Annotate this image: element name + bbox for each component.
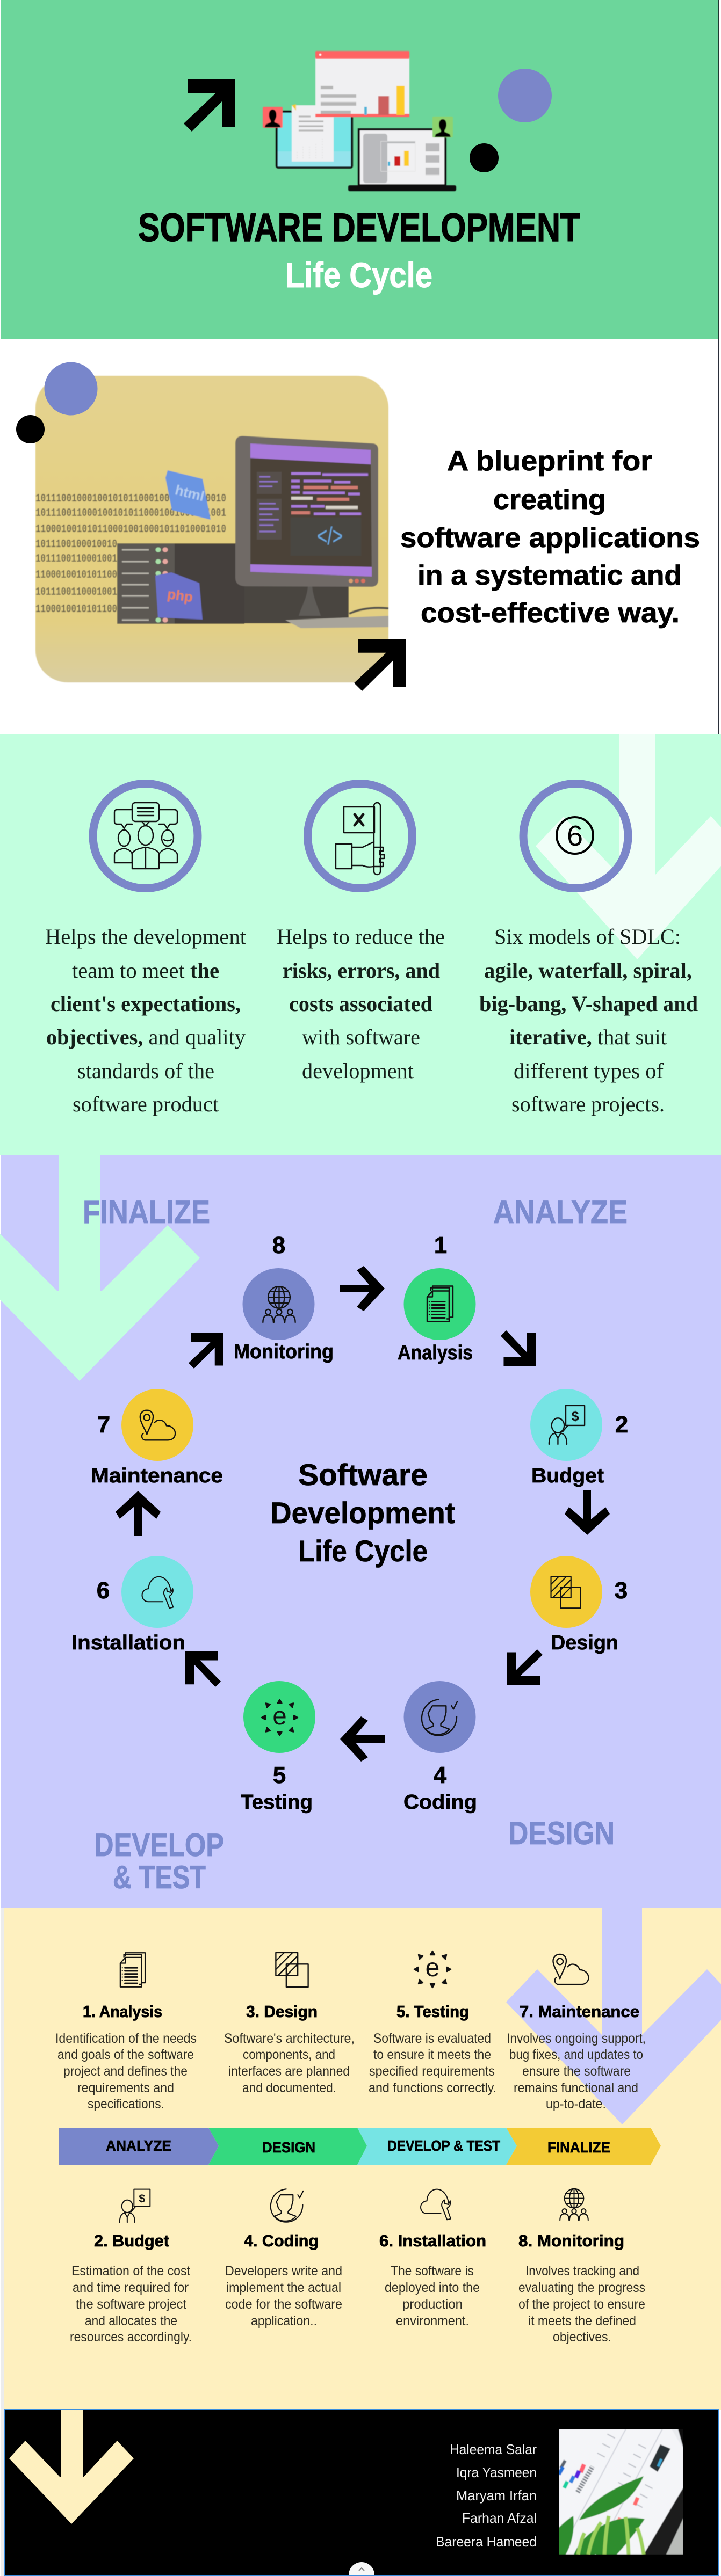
item: design: components, and [243,2047,335,2062]
text block: six models: big-bang, V-shaped and [479,992,698,1016]
text block: blueprint statement: in a systematic and [417,560,682,591]
item: design: 3. Design [246,2002,318,2021]
step 3 design [530,1556,628,1654]
icon: team ring [93,784,198,888]
step 6 installation: 6 [97,1577,110,1604]
arrow: 2 to 3 [565,1490,610,1535]
item: analysis: requirements and [77,2080,174,2095]
text block: client expectations: software product [73,1092,219,1116]
item: maintenance: bug fixes, and updates to [509,2047,643,2062]
chevron bar: FINALIZE [547,2139,610,2156]
decorative arrow [9,2410,134,2524]
item: budget: and allocates the [85,2313,177,2328]
image: coding workstation photo: html [174,482,206,504]
item: testing: Software is evaluated [373,2031,491,2046]
icon: risk flag ring [307,784,413,888]
icon: black circle [16,415,45,443]
credits [436,2441,537,2550]
step 2 budget [530,1389,628,1487]
arrow: 5 to 6 [185,1651,221,1687]
step 1 analysis [398,1232,476,1364]
image: coding workstation photo: 1011100110001001 [35,586,117,599]
text block: six models: iterative, that suit [509,1025,667,1049]
decorative arrow [0,1155,200,1381]
item: maintenance: 7. Maintenance [520,2002,639,2021]
text block: blueprint statement: creating [493,484,606,515]
step 5 testing: Testing [241,1791,313,1814]
item: maintenance: ensure the software [522,2064,631,2079]
phase label: develop and test [96,1833,223,1889]
text block: blueprint statement: software applications [400,522,700,554]
image: coding workstation photo: </> [317,522,343,550]
item: installation: deployed into the [385,2280,480,2295]
icon: black circle [470,143,499,172]
item: maintenance: remains functional and [514,2080,638,2095]
phase label: design: DESIGN [508,1815,615,1851]
text block: client expectations: Helps the development [45,925,246,949]
image: dashboard with plant [559,2429,683,2555]
credits: Haleema Salar [450,2441,537,2457]
item: budget: 2. Budget [94,2231,169,2250]
item: monitoring: 8. Monitoring [518,2231,624,2250]
text block: blueprint statement [400,446,700,629]
credits: Maryam Irfan [456,2487,537,2504]
arrow: 4 to 5 [340,1716,385,1762]
item: budget: the software project [76,2297,186,2312]
item: monitoring: evaluating the progress [518,2280,645,2295]
text block: six models: Six models of SDLC: [494,925,681,949]
phase label: analyze: ANALYZE [493,1194,628,1230]
chevron bar: DEVELOP & TEST [387,2137,500,2154]
item: design: and documented. [242,2080,336,2095]
item: coding [225,2189,342,2328]
step 6 installation [71,1556,193,1654]
phase label: develop and test: & TEST [113,1859,206,1895]
text block: six models [479,925,698,1116]
step 7 maintenance [91,1389,223,1487]
panel: footer [1,2406,719,2576]
item: monitoring: of the project to ensure [518,2297,645,2312]
item: analysis: and goals of the software [57,2047,194,2062]
icon: header arrow [184,79,235,132]
phase label: develop and test: DEVELOP [94,1827,224,1863]
arrow: 8 to 1 [340,1266,385,1311]
item: coding: implement the actual [226,2280,341,2295]
text block: client expectations: standards of the [77,1059,214,1083]
image: coding workstation photo: 1100010010101100 [35,569,117,581]
icon: six models ring [523,784,628,888]
item: installation [379,2189,486,2328]
text block: client expectations: client's expectations, [51,992,241,1016]
step 8 monitoring: Monitoring [234,1341,334,1363]
item: monitoring [518,2189,645,2345]
item: coding: Developers write and [225,2264,342,2279]
decorative arrow [506,1908,721,2124]
text block: six models: different types of [514,1059,664,1083]
text block: blueprint statement: cost-effective way. [421,598,680,629]
icon: six models ring: 6 [567,820,583,852]
item: installation: environment. [396,2313,469,2328]
text block: client expectations [45,925,246,1116]
text block: blueprint statement: A blueprint for [447,446,652,477]
chevron bar: DESIGN [262,2139,315,2156]
credits: Iqra Yasmeen [456,2464,537,2480]
text block: reduce risks: development [302,1059,414,1083]
panel: life cycle diagram [0,1155,721,1908]
step 1 analysis: 1 [434,1232,447,1258]
chevron bar [59,2128,661,2165]
image: coding workstation photo: 1011100110001001 [35,553,117,565]
credits: Bareera Hameed [436,2534,537,2550]
text block: reduce risks: with software [302,1025,420,1049]
icon: purple circle [44,362,98,416]
arrow: 7 to 8 [189,1333,223,1369]
item: coding: code for the software [225,2297,342,2312]
chevron bar: ANALYZE [106,2137,171,2154]
step 4 coding [403,1681,477,1814]
panel: header [1,0,719,339]
icon: arrow [354,639,406,691]
item: analysis: specifications. [88,2097,164,2112]
item: design [224,1953,355,2095]
text block: reduce risks [277,925,445,1083]
text block: client expectations: objectives, and quality [46,1025,246,1049]
step 4 coding: 4 [434,1762,447,1788]
item: analysis: Identification of the needs [55,2031,197,2046]
credits: Farhan Afzal [462,2510,537,2526]
arrow: 1 to 2 [501,1330,536,1366]
text block: reduce risks: costs associated [289,992,432,1016]
item: installation: 6. Installation [379,2231,486,2250]
step 7 maintenance: 7 [97,1411,110,1438]
item: coding: 4. Coding [244,2231,319,2250]
step 5 testing [241,1681,315,1814]
decorative arrow [536,734,721,959]
panel: phase details [1,1908,721,2410]
icon: scroll to top button [349,2562,374,2575]
item: budget [70,2189,192,2345]
phase label: finalize: FINALIZE [83,1194,210,1230]
item: monitoring: it meets the defined [528,2313,636,2328]
text block: six models: agile, waterfall, spiral, [484,958,692,983]
step 7 maintenance: Maintenance [91,1465,223,1487]
item: design: Software's architecture, [224,2031,355,2046]
central title: Software [298,1458,428,1491]
image: coding workstation photo [35,376,388,682]
step 8 monitoring: 8 [272,1232,285,1258]
arrow: 3 to 4 [507,1649,543,1685]
item: budget: and time required for [73,2280,189,2295]
step 3 design: 3 [615,1577,628,1604]
item: testing: to ensure it meets the [373,2047,491,2062]
text block: reduce risks: Helps to reduce the [277,925,445,949]
item: design: interfaces are planned [228,2064,350,2079]
item: analysis: project and defines the [63,2064,188,2079]
item: maintenance: up-to-date. [546,2097,606,2112]
item: testing: and functions correctly. [369,2080,496,2095]
step 3 design: Design [551,1632,618,1654]
subtitle: Life Cycle [285,255,432,295]
central title [270,1458,455,1568]
step 2 budget: Budget [531,1465,604,1487]
item: budget: Estimation of the cost [71,2264,190,2279]
item: maintenance: Involves ongoing support, [507,2031,646,2046]
step 8 monitoring [234,1232,334,1363]
icon: software illustration [263,51,456,191]
item: testing: 5. Testing [396,2002,469,2021]
arrow: 6 to 7 [116,1491,161,1536]
image: coding workstation photo: 1011100100010010101100010010001010010 [35,493,226,505]
icon: purple circle [498,69,552,122]
item: installation: production [402,2297,463,2312]
item: installation: The software is [391,2264,474,2279]
image: coding workstation photo: php [167,586,194,605]
step 2 budget: 2 [615,1411,628,1438]
step 5 testing: 5 [273,1762,286,1788]
central title: Life Cycle [298,1534,428,1568]
item: monitoring: Involves tracking and [525,2264,639,2279]
title: SOFTWARE DEVELOPMENT [138,205,580,250]
step 6 installation: Installation [71,1632,185,1654]
step 1 analysis: Analysis [398,1342,473,1364]
image: coding workstation photo: 1011100100010010 [35,539,117,551]
item: monitoring: objectives. [553,2330,611,2345]
item: testing: specified requirements [369,2064,495,2079]
text block: reduce risks: risks, errors, and [283,958,440,983]
image: coding workstation photo: 1100010010101100010010001011010001010 [35,523,226,536]
item: testing [369,1951,496,2095]
text block: six models: software projects. [511,1092,665,1116]
central title: Development [270,1496,455,1530]
item: analysis: 1. Analysis [83,2002,162,2021]
item: analysis [55,1953,197,2112]
panel: benefits [0,734,721,1155]
image: coding workstation photo: 1100010010101100 [35,603,117,616]
text block: client expectations: team to meet the [72,958,219,983]
panel: intro [16,339,719,734]
item: coding: application.. [251,2313,317,2328]
item: budget: resources accordingly. [70,2330,192,2345]
image: coding workstation photo: 1011100110001001010110001001000101001 [35,507,226,520]
step 4 coding: Coding [403,1791,477,1814]
item: maintenance [507,1954,646,2112]
